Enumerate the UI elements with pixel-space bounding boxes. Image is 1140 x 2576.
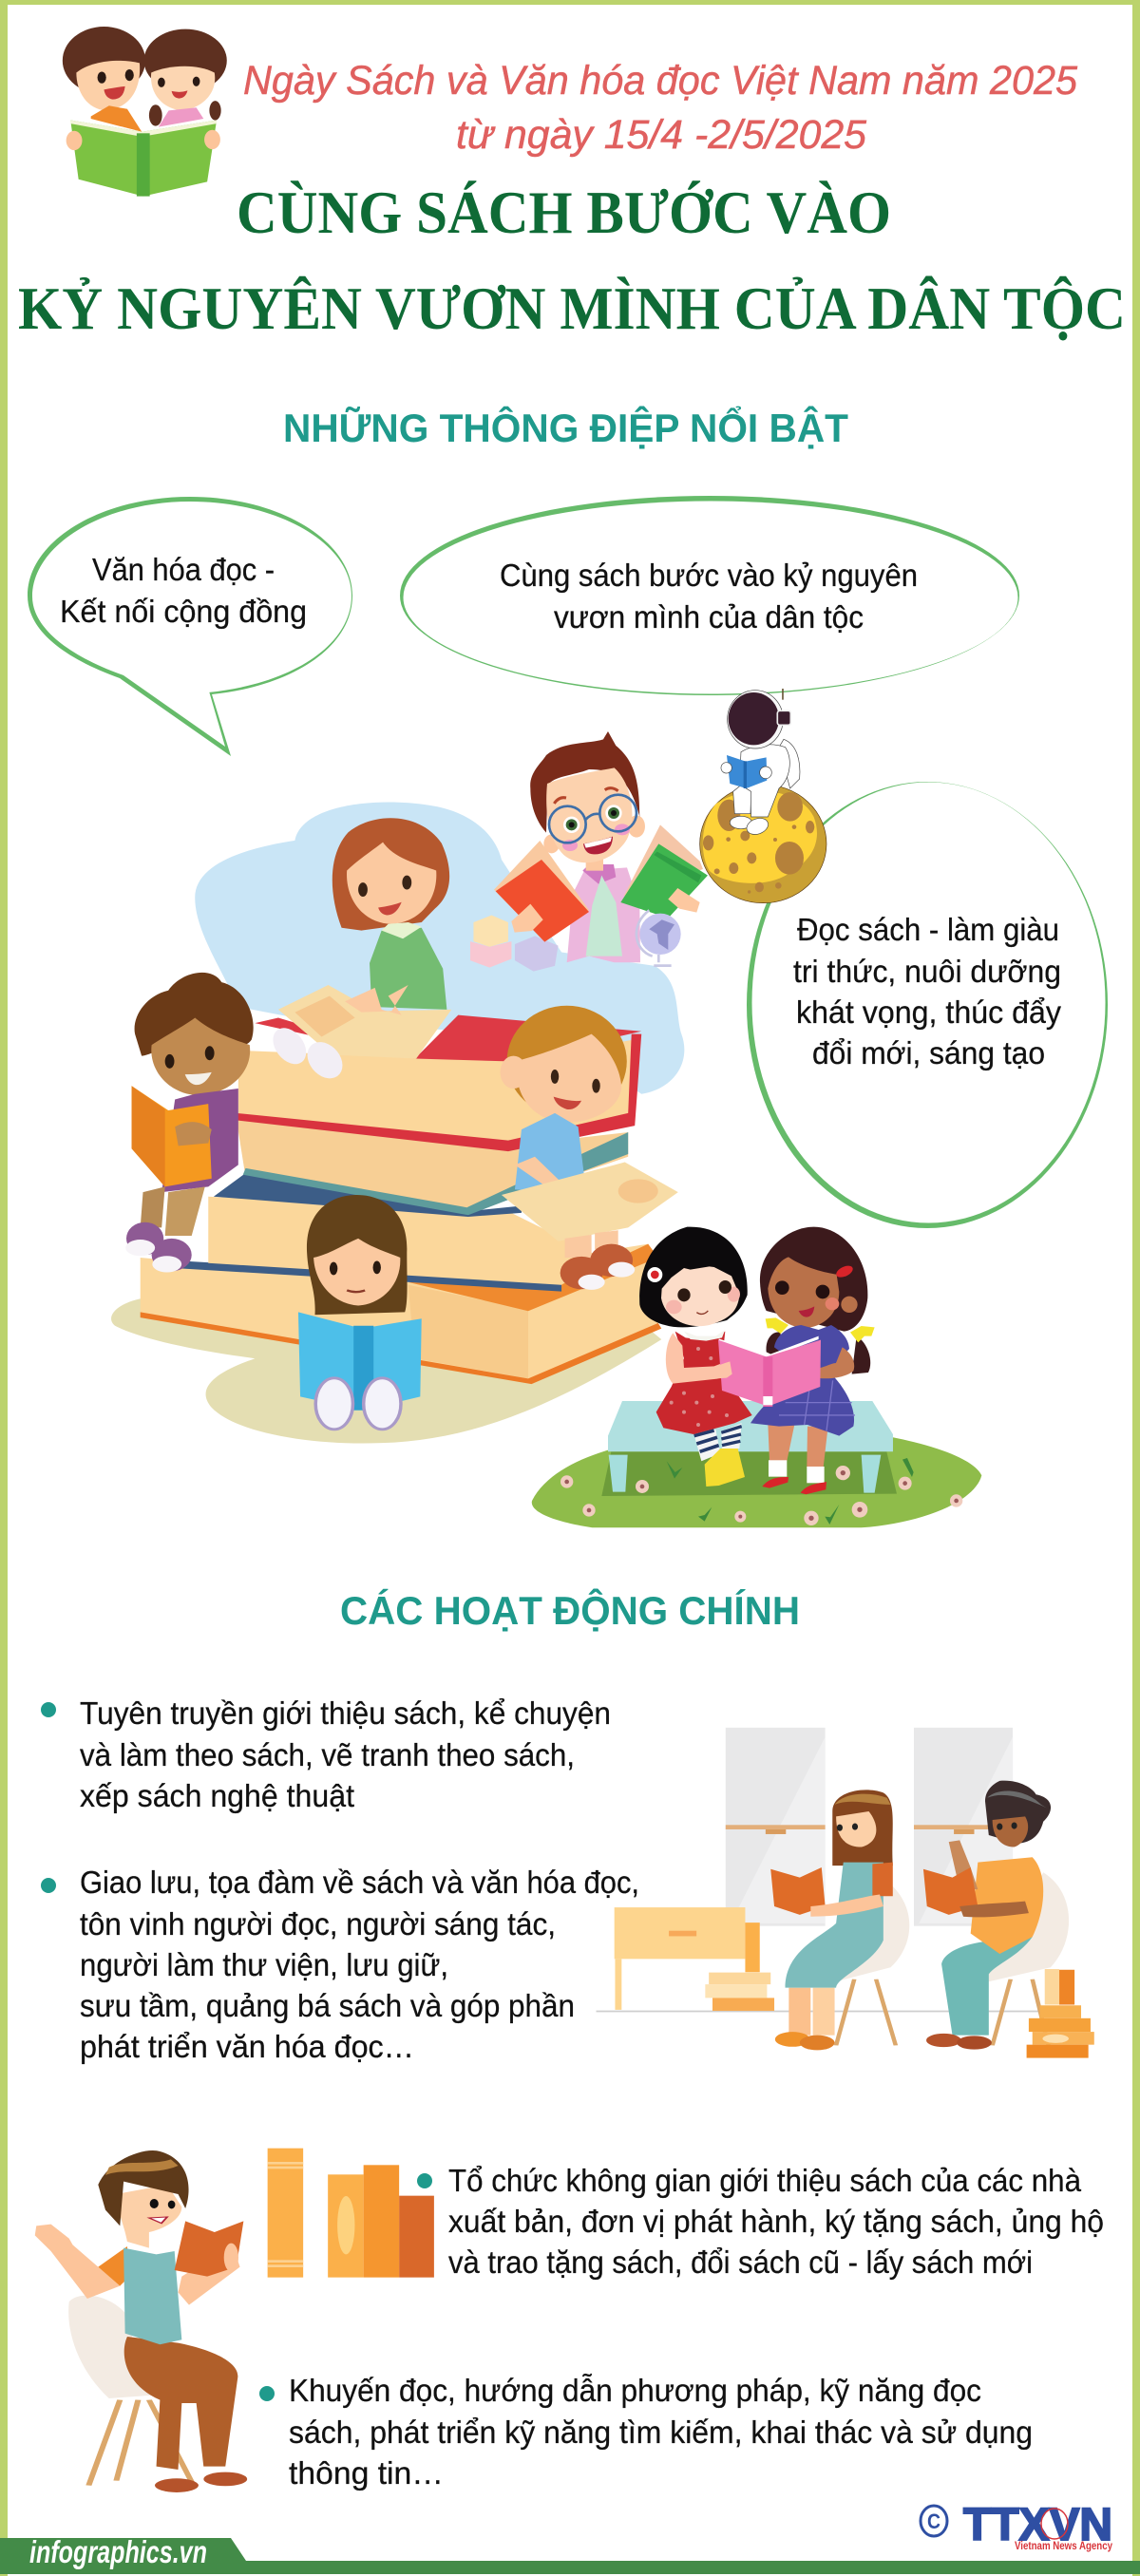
bullet: reading guidance — [259, 2373, 1033, 2491]
grass flowers — [560, 1466, 962, 1525]
bullet: exchanges and honours: sưu tầm, quảng bá sách và góp phần — [80, 1988, 575, 2023]
bullet: book promotion activities: xếp sách nghệ thuật — [80, 1778, 354, 1813]
child: girl with blue book — [298, 1195, 422, 1430]
heading: highlighted messages: NHỮNG THÔNG ĐIỆP NỔI BẬT — [283, 404, 848, 450]
logo: TTXVN: C — [927, 2510, 940, 2533]
cloud background — [195, 803, 684, 1094]
bullet: reading guidance: thông tin… — [289, 2455, 444, 2491]
bullet: book promotion activities: Tuyên truyền giới thiệu sách, kể chuyện — [80, 1695, 611, 1731]
subtitle: event name and dates — [243, 58, 1078, 158]
bullet: book promotion activities: và làm theo sách, vẽ tranh theo sách, — [80, 1737, 575, 1772]
book stack — [141, 1015, 661, 1384]
girl in overalls on chair — [770, 1790, 909, 2050]
illustration: two girls reading on a bench — [532, 1227, 981, 1527]
girl in purple dress — [750, 1227, 875, 1494]
bullet: book exhibition spaces: Tổ chức không gian giới thiệu sách của các nhà — [448, 2163, 1082, 2198]
ground shadow — [111, 1298, 661, 1444]
desk and books — [615, 1907, 774, 2011]
speech bubble: national rise message: vươn mình của dân tộc — [554, 599, 864, 635]
title — [18, 179, 1126, 342]
footer band — [0, 2534, 1140, 2574]
illustration: teacher with books — [494, 731, 708, 966]
subtitle: event name and dates: từ ngày 15/4 -2/5/2025 — [456, 112, 867, 158]
illustration: astronaut reading on the moon — [700, 689, 826, 903]
bullet: book promotion activities — [41, 1695, 611, 1813]
woman in orange shirt on chair — [923, 1781, 1094, 2058]
icon: two children reading a green book — [63, 27, 227, 197]
child: girl in green dress — [266, 818, 451, 1083]
pink book — [714, 1336, 821, 1407]
stacked books — [1027, 1969, 1094, 2058]
logo: TTXVN: Vietnam News Agency — [1015, 2539, 1112, 2552]
speech bubble: reading culture: Kết nối cộng đồng — [60, 594, 307, 629]
bullet: reading guidance: Khuyến đọc, hướng dẫn phương pháp, kỹ năng đọc — [289, 2373, 981, 2408]
bullet: book exhibition spaces — [417, 2163, 1104, 2280]
moon — [700, 785, 826, 903]
astronaut — [721, 689, 800, 837]
subtitle: event name and dates: Ngày Sách và Văn hóa đọc Việt Nam năm 2025 — [243, 58, 1078, 104]
grass — [532, 1437, 981, 1527]
toy blocks — [470, 916, 559, 972]
speech bubble: reading culture: Văn hóa đọc - — [92, 552, 275, 587]
bullet: reading guidance: sách, phát triển kỹ năng tìm kiếm, khai thác và sử dụng — [289, 2415, 1033, 2450]
illustration: children reading on a stack of books — [111, 803, 684, 1444]
speech bubble: benefits of reading: Đọc sách - làm giàu — [797, 912, 1059, 947]
windows — [726, 1728, 1013, 1926]
footer site name: infographics.vn — [29, 2534, 207, 2569]
child: boy in blue shirt — [501, 1006, 678, 1290]
speech bubble: benefits of reading: tri thức, nuôi dưỡng — [793, 954, 1061, 989]
child: boy with orange book — [125, 973, 254, 1272]
heading: main activities: CÁC HOẠT ĐỘNG CHÍNH — [340, 1587, 800, 1633]
bullet: exchanges and honours: người làm thư viện, lưu giữ, — [80, 1947, 448, 1982]
speech bubble: benefits of reading — [747, 782, 1108, 1228]
title: CÙNG SÁCH BƯỚC VÀO — [237, 179, 891, 246]
speech bubble: benefits of reading: đổi mới, sáng tạo — [812, 1035, 1045, 1070]
bullet: book exhibition spaces: xuất bản, đơn vị phát hành, ký tặng sách, ủng hộ — [448, 2204, 1104, 2239]
speech bubble: national rise message: Cùng sách bước vào kỷ nguyên — [500, 558, 918, 593]
icon: globe — [636, 910, 681, 966]
bullet: exchanges and honours: Giao lưu, tọa đàm về sách và văn hóa đọc, — [80, 1865, 639, 1900]
bullet: exchanges and honours: tôn vinh người đọc, người sáng tác, — [80, 1906, 556, 1941]
speech bubble: benefits of reading: khát vọng, thúc đẩy — [796, 994, 1061, 1030]
logo: TTXVN: TTXVN — [963, 2500, 1112, 2550]
speech bubble: reading culture — [28, 497, 352, 756]
floor line — [597, 2011, 1039, 2012]
speech bubble: national rise message — [400, 496, 1019, 695]
illustration: two readers in a room — [597, 1728, 1094, 2058]
girl in red dress — [639, 1227, 752, 1487]
bench — [608, 1401, 893, 1493]
bullet: book exhibition spaces: và trao tặng sách, đổi sách cũ - lấy sách mới — [448, 2245, 1033, 2280]
illustration: row of orange books — [268, 2149, 434, 2278]
bullet: exchanges and honours — [41, 1865, 639, 2064]
illustration: seated boy reading — [35, 2150, 247, 2492]
bullet: exchanges and honours: phát triển văn hóa đọc… — [80, 2029, 414, 2064]
